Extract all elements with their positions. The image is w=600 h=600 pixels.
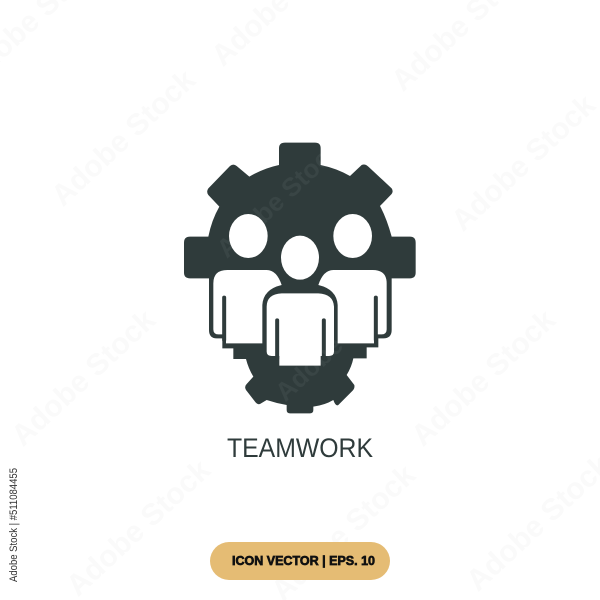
person: left body (213, 270, 282, 343)
badge pill (210, 542, 390, 580)
person: right body (318, 270, 387, 343)
watermark pattern: Adobe Stock (60, 453, 217, 600)
gear watermark (211, 133, 349, 407)
stock id side text: Adobe Stock | #511084455 (8, 468, 20, 582)
badge text: ICON VECTOR | EPS. 10 (232, 554, 375, 568)
watermark pattern: Adobe Stock (5, 303, 162, 453)
badge: icon vector eps 10 (210, 542, 390, 580)
gear watermark: Adobe Stock (211, 133, 348, 264)
person: center body (267, 293, 334, 366)
person: right head (333, 214, 372, 258)
watermark pattern: Adobe Stock (405, 303, 562, 453)
watermark pattern: Adobe Stock (445, 88, 600, 238)
person: left head (229, 214, 268, 258)
gear watermark: Adobe (269, 330, 349, 407)
gear silhouette (184, 143, 416, 413)
arm dividers (224, 298, 376, 358)
watermark pattern: Adobe Stock (45, 63, 202, 213)
person: center head (281, 236, 319, 280)
icon: gear with three people (184, 143, 416, 413)
title: TEAMWORK: TEAMWORK (227, 433, 373, 463)
